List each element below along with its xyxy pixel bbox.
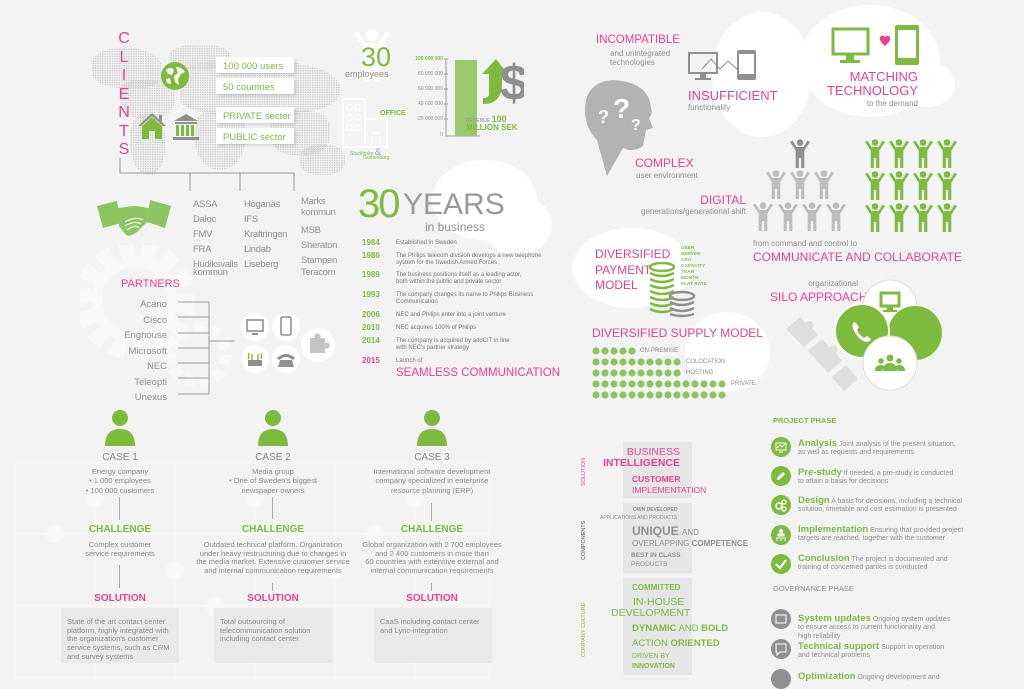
icon: mismatched monitor and phone — [688, 50, 756, 80]
panel: case 3 — [342, 410, 522, 665]
panel: case 1: • 1 000 employees — [89, 476, 151, 485]
timeline: 1986 — [362, 251, 380, 260]
text block: partner names: Unexus — [135, 392, 167, 403]
panel: solution / components / culture stack: COMMITTED — [632, 583, 680, 592]
bar chart: revenue: 80 000 000 — [418, 71, 443, 77]
text block: client names: FRA — [193, 244, 211, 255]
panel: solution / components / culture stack: IMPLEMENTATION — [632, 485, 706, 495]
text block: client stats boxes — [216, 57, 297, 147]
text block: client stats boxes: 100 000 users — [223, 61, 283, 72]
panel: case 1: CHALLENGE — [89, 524, 151, 535]
text: Design A basis for decisions, including a technical — [798, 495, 962, 506]
timeline: The company changes its name to Philips Business — [396, 292, 533, 298]
icon: globe — [161, 62, 189, 90]
bar chart: revenue — [415, 56, 480, 138]
panel: case 2: and internal communication requirements — [204, 566, 342, 575]
text block: office — [350, 110, 406, 161]
text block: payment options: YEAR — [681, 270, 694, 275]
icon: user — [105, 410, 135, 446]
text block: client names: Hudiksvalls — [193, 259, 238, 270]
timeline: 2006 — [362, 310, 380, 319]
callout: case 3 solution — [374, 608, 492, 663]
text block: payment options: MONTH — [681, 276, 699, 281]
decorative puzzle background bottom-left — [15, 462, 490, 682]
text block: project phase descriptions — [798, 440, 956, 458]
text block: office: Gothenburg — [363, 155, 389, 161]
diagram: silo venn circles — [834, 280, 942, 390]
list: governance icons — [771, 609, 793, 682]
text block: payment options: USER — [681, 246, 694, 251]
text block: communicate and collaborate — [753, 239, 962, 264]
panel: case 1: • 100 000 customers — [86, 486, 154, 495]
text block: client stats boxes: PUBLIC sector — [223, 132, 286, 143]
panel: case 1: Energy company — [92, 467, 148, 476]
timeline: SEAMLESS COMMUNICATION — [396, 367, 560, 379]
timeline: both within the public and private sector — [396, 279, 501, 285]
text block: client names: kommun — [301, 206, 336, 218]
panel: solution / components / culture stack: OWN DEVELOPED — [633, 507, 677, 513]
text: Implementation Ensuring that provided project — [798, 524, 963, 535]
text block: client names: Stampen — [301, 255, 337, 266]
panel: case 2: CASE 2 — [255, 452, 291, 463]
panel: case 3: International software development — [374, 467, 490, 476]
text block: client stats boxes: 50 countries — [223, 82, 275, 93]
list: project phase items — [771, 437, 971, 577]
text block: client names: Kraftringen — [244, 229, 287, 240]
panel: case 3: resource planning (ERP) — [391, 486, 473, 495]
bar chart: revenue: 40 000 000 — [418, 101, 443, 107]
panel: solution / components / culture stack: OVERLAPPING COMPETENCE — [632, 539, 748, 548]
text block: INCOMPATIBLE: technologies — [610, 58, 655, 67]
text block: payment options: SERVER — [681, 252, 701, 257]
timeline: Communication — [396, 299, 438, 305]
text block: partner names: NEC — [147, 361, 167, 372]
text block: governance descriptions: high reliability — [798, 633, 840, 640]
text block: revenue label: REVENUE 100 — [466, 114, 507, 124]
panel: case 2: Media group — [252, 467, 294, 476]
text block: client names: Sheraton — [301, 240, 337, 251]
text block: governance descriptions: to ensure access to current functionality and — [798, 624, 935, 631]
panel: case 3: internal communication requirements — [370, 566, 493, 575]
panel: solution / components / culture stack: INTELLIGENCE — [603, 457, 680, 469]
text block: silo approach: SILO APPROACH — [770, 290, 867, 304]
client bracket lines — [120, 158, 294, 191]
timeline: NEC and Philips enter into a joint venture — [396, 312, 506, 318]
panel: solution / components / culture stack: DEVELOPMENT — [611, 607, 690, 619]
text block: DIVERSIFIED PAYMENT MODEL: PAYMENT — [595, 262, 651, 276]
timeline: 2010 — [362, 323, 380, 332]
text block: partner names — [124, 299, 167, 403]
text block: communicate and collaborate: from command and control to — [753, 239, 857, 248]
text block: silo approach — [770, 279, 867, 304]
panel: solution / components / culture stack: INNOVATION — [632, 663, 675, 670]
callout: case 1 solution: service systems, such as CRM — [67, 643, 170, 652]
icon: gray hierarchy pyramid people — [753, 139, 846, 231]
timeline: system for the Swedish Armed Forces — [396, 260, 497, 266]
heading: 30 YEARS in business — [358, 182, 505, 234]
callout: case 1 solution: State of the art contact center — [67, 617, 165, 626]
timeline: The Philips telecom division develops a new telephone — [396, 253, 541, 259]
icon: user — [417, 410, 447, 446]
text block: client names: Daloc — [193, 214, 216, 225]
text: Pre-study If needed, a pre-study is conducted — [798, 467, 953, 478]
text block: 30 employees — [345, 42, 391, 79]
text block: DIVERSIFIED PAYMENT MODEL: MODEL — [595, 278, 638, 292]
panel: case 3: SOLUTION — [406, 593, 458, 604]
text block: client names: FMV — [193, 229, 212, 240]
timeline: 1984 — [362, 238, 380, 247]
panel: case 3: company specialized in enterprise — [376, 476, 488, 485]
timeline: 2015 — [362, 356, 380, 365]
panel: case 1: CASE 1 — [102, 452, 138, 463]
timeline: NEC acquires 100% of Philips — [396, 325, 476, 331]
text: Conclusion The project is documented and — [798, 553, 948, 564]
panel: case 3: and 2 400 customers in more than — [375, 549, 489, 558]
text block: payment options: FLAT RATE — [681, 282, 707, 287]
panel: solution / components / culture stack: UNIQUE AND — [632, 524, 699, 538]
callout: case 2 solution: including contact center — [220, 634, 299, 643]
partner connector lines — [178, 302, 235, 394]
callout: case 3 solution: and Lync-integration — [380, 626, 448, 635]
icon: matching technology devices — [832, 25, 919, 65]
text block: MATCHING TECHNOLOGY: to the demand — [867, 99, 918, 108]
icon: house — [138, 113, 166, 139]
icon: head with question marks: ? — [631, 117, 641, 134]
callout: case 3 solution: CaaS including contact center — [380, 617, 480, 626]
heading: 30 YEARS in business: 30 — [358, 182, 398, 226]
text: Optimization Ongoing development and — [798, 671, 940, 682]
text: and technical problems — [798, 652, 870, 659]
text: Technical support Support in operation — [798, 641, 944, 652]
text block: client names: MSB — [301, 225, 321, 236]
timeline: 1993 — [362, 290, 380, 299]
icon: head with question marks: ? — [598, 107, 609, 127]
chart: supply dot rows: PRIVATE — [731, 381, 756, 387]
chart: supply dot rows: ON-PREMISE — [640, 348, 678, 354]
text block: MATCHING TECHNOLOGY: MATCHING — [850, 69, 918, 84]
chart: supply dot rows: HOSTING — [686, 370, 713, 376]
panel: solution / components / culture stack: SOLUTION — [581, 458, 587, 486]
icon: employee figure — [354, 30, 390, 82]
text block: partner names: Teleopti — [134, 376, 167, 388]
text block: project phase descriptions: Analysis Joint analysis of the present situation, — [798, 438, 956, 449]
text: solution, timetable and cost estimation is presented — [798, 506, 957, 513]
panel: solution / components / culture stack: APPLICATIONS AND PRODUCTS — [600, 515, 677, 521]
icon: head with question marks — [585, 80, 653, 176]
text block: COMPLEX: user environment — [636, 171, 698, 180]
text block: DIGITAL — [641, 193, 746, 216]
text block: client names — [193, 196, 337, 278]
callout: case 1 solution — [61, 608, 179, 663]
heading: DIVERSIFIED SUPPLY MODEL: DIVERSIFIED SUPPLY MODEL — [592, 326, 763, 340]
chart: supply dot rows: COLOCATION — [686, 359, 725, 365]
text block: revenue label: MILLION SEK — [466, 123, 518, 132]
panel: case 2: SOLUTION — [247, 593, 299, 604]
panel: case 3: 60 countries with extensive external and — [365, 557, 499, 566]
timeline: Launch of — [396, 358, 422, 364]
panel: solution / components / culture stack: IN-HOUSE — [633, 596, 684, 608]
panel: solution / components / culture stack — [580, 440, 750, 678]
heading: PROJECT PHASE: PROJECT PHASE — [773, 416, 836, 425]
panel: case 1 — [30, 410, 210, 665]
panel: solution / components / culture stack: BEST IN CLASS — [631, 552, 680, 559]
decorative world dot map — [92, 46, 345, 175]
timeline: Established in Sweden — [396, 240, 457, 246]
title: CLIENTS vertical: C L I E N T S — [118, 30, 130, 158]
text block: INSUFFICIENT — [688, 88, 778, 112]
text block: INCOMPATIBLE — [596, 34, 680, 67]
decorative gears — [80, 245, 250, 405]
text block: 30 employees: employees — [345, 69, 389, 79]
callout: case 1 solution: the organization's customer — [67, 634, 158, 643]
heading: 30 YEARS in business: YEARS — [403, 188, 505, 221]
text block: office: OFFICE — [380, 110, 406, 117]
panel: case 2 — [183, 410, 363, 665]
text: targets are reached, together with the customer — [798, 535, 945, 542]
panel: case 3: CASE 3 — [414, 452, 450, 463]
panel: solution / components / culture stack: ACTION ORIENTED — [632, 638, 720, 649]
text block: revenue label — [466, 114, 518, 132]
icon: office building — [342, 98, 388, 148]
panel: case 1: Complex customer — [89, 540, 151, 549]
panel: solution / components / culture stack: PRODUCTS — [631, 561, 667, 568]
text block: client stats boxes: PRIVATE sector — [223, 111, 291, 122]
text block: office: Stockholm & — [350, 147, 381, 158]
text block: 30 employees: 30 — [361, 42, 391, 72]
timeline: The company is acquired by addCIT in line — [396, 338, 510, 344]
callout: case 1 solution: and survey systems — [67, 652, 133, 661]
callout: case 2 solution: telecommunication solution — [220, 626, 310, 635]
text block: governance descriptions — [798, 615, 950, 641]
bar chart: revenue: 60 000 000 — [418, 86, 443, 92]
timeline: The business positions itself as a leading actor, — [396, 272, 521, 278]
panel: case 1: service requirements — [85, 549, 155, 558]
text block: payment options: CAPACITY — [681, 264, 705, 269]
panel: case 3: Global organization with 2 700 employees — [362, 540, 502, 549]
text block: client names: Liseberg — [244, 259, 278, 270]
text block: client names: ASSA — [193, 199, 217, 210]
text block: INCOMPATIBLE: INCOMPATIBLE — [596, 34, 680, 46]
panel: solution / components / culture stack: COMPANY CULTURE — [581, 603, 587, 657]
text block: MATCHING TECHNOLOGY: TECHNOLOGY — [827, 83, 918, 98]
text block: INSUFFICIENT: functionality — [688, 103, 730, 112]
text block: COMPLEX — [635, 156, 698, 180]
timeline: 1989 — [362, 270, 380, 279]
timeline — [362, 238, 560, 379]
text block: governance descriptions: System updates Ongoing system updates — [798, 613, 950, 624]
text block: COMPLEX: COMPLEX — [635, 156, 694, 170]
icon: head with question marks: ? — [613, 93, 630, 124]
heading: PARTNERS: PARTNERS — [121, 278, 180, 290]
panel: case 2: Outdated technical platform. Organization — [204, 540, 342, 549]
text block: project phase descriptions: as well as requests and requirements — [798, 449, 914, 456]
panel: case 2: the media market. Extensive customer service — [196, 557, 350, 566]
text block: client names: kommun — [193, 267, 228, 278]
text block: INCOMPATIBLE: and unintegrated — [610, 49, 670, 58]
text block: client names: Höganäs — [244, 199, 280, 210]
text block: partner names: Acano — [140, 299, 167, 310]
text block: client names: Lindab — [244, 244, 271, 255]
panel: case 2: • One of Sweden's biggest — [229, 476, 317, 485]
panel: solution / components / culture stack: DRIVEN BY — [632, 653, 670, 660]
text block: partner names: Cisco — [143, 314, 167, 326]
text block: client names: IFS — [244, 214, 258, 225]
callout: case 1 solution: platform, highly integrated with — [67, 626, 169, 635]
bar chart: revenue: 100 000 000 — [415, 56, 443, 62]
text block: INSUFFICIENT: INSUFFICIENT — [688, 88, 778, 103]
heading: GOVERNANCE PHASE: GOVERNANCE PHASE — [773, 584, 854, 593]
panel: solution / components / culture stack: DYNAMIC AND BOLD — [632, 623, 728, 634]
speech bubble behind 30 years — [432, 160, 537, 240]
icon: user — [258, 410, 288, 446]
icon: revenue arrow and dollar — [482, 55, 524, 106]
text block: DIGITAL: DIGITAL — [700, 193, 746, 207]
panel: solution / components / culture stack: COMPONENTS — [581, 521, 587, 560]
icon: bank — [173, 114, 199, 140]
icon: gray puzzle pieces — [786, 317, 858, 391]
text block: DIGITAL: generations/generational shift — [641, 207, 746, 216]
bar chart: revenue: 20 000 000 — [418, 116, 443, 122]
text: training of concerned parties is conducted — [798, 564, 928, 571]
callout: case 2 solution: Total outsourcing of — [220, 617, 285, 626]
bar chart: revenue: 0 — [440, 132, 443, 138]
speech bubbles top right — [712, 12, 812, 137]
text block: MATCHING TECHNOLOGY — [827, 69, 918, 108]
text: to attain a basis for decisions — [798, 478, 888, 485]
panel: solution / components / culture stack: BUSINESS — [627, 446, 680, 458]
bubbles: payment/supply — [572, 228, 692, 308]
timeline: 2014 — [362, 336, 380, 345]
text block: payment options: CPU — [681, 258, 691, 263]
icon: coin stacks — [648, 262, 696, 318]
text block: client names: Marks — [301, 196, 325, 207]
heading: 30 YEARS in business: in business — [425, 220, 485, 234]
panel: case 3: CHALLENGE — [401, 524, 463, 535]
callout: case 2 solution — [214, 608, 332, 663]
icon: green collaborating people grid — [865, 139, 957, 232]
panel: case 2: under heavy restructuring due to changes in — [200, 549, 346, 558]
icons: communication devices — [241, 313, 335, 373]
chart: supply dot rows — [592, 347, 756, 399]
panel: case 2: newspaper owners — [242, 486, 304, 495]
text block: DIVERSIFIED PAYMENT MODEL — [595, 247, 670, 292]
icon: handshake — [97, 200, 171, 236]
timeline: with NEC's partner strategy — [396, 345, 469, 351]
text block: client names: Teracom — [301, 267, 335, 278]
panel: case 2: CHALLENGE — [242, 524, 304, 535]
text block: partner names: Microsoft — [128, 346, 167, 356]
text block: silo approach: organizational — [808, 279, 858, 288]
text block: communicate and collaborate: COMMUNICATE AND COLLABORATE — [753, 250, 962, 264]
panel: case 1: SOLUTION — [94, 593, 146, 604]
panel: solution / components / culture stack: CUSTOMER — [632, 474, 680, 484]
text block: payment options — [681, 246, 707, 287]
text block: partner names: Enghouse — [124, 330, 167, 341]
text block: DIVERSIFIED PAYMENT MODEL: DIVERSIFIED — [595, 247, 670, 261]
